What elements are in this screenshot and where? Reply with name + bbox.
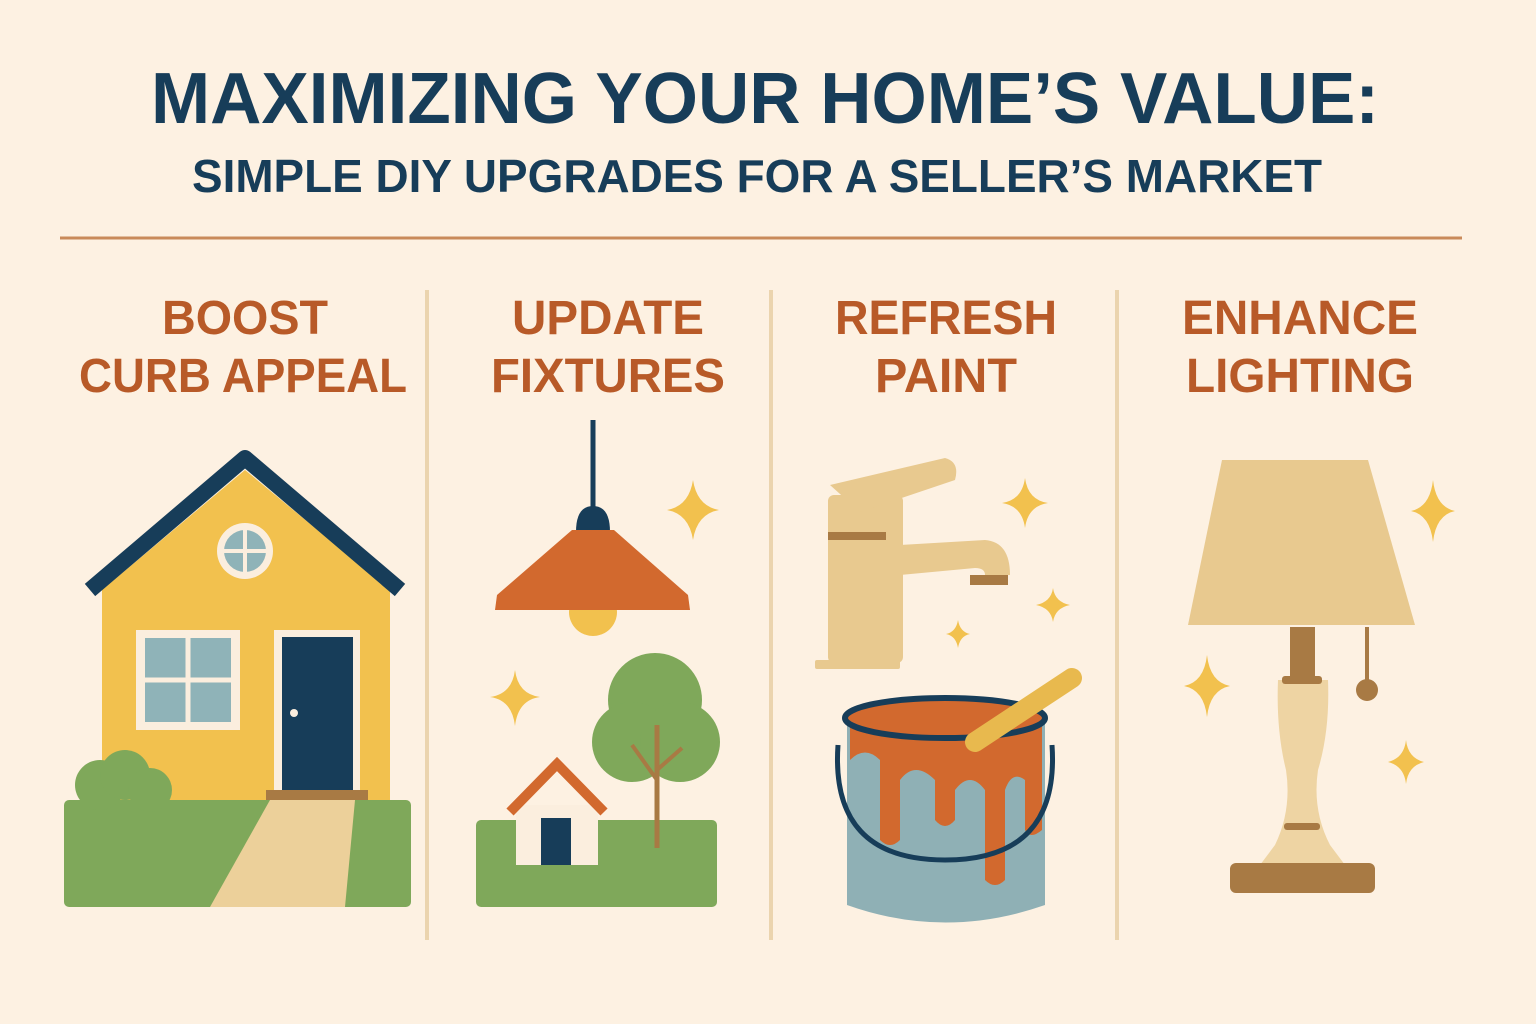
heading: enhance lighting: LIGHTING xyxy=(1186,350,1414,403)
icon: house xyxy=(64,458,411,907)
heading: refresh paint xyxy=(835,292,1057,403)
heading: update fixtures: FIXTURES xyxy=(491,350,725,403)
heading: enhance lighting xyxy=(1182,292,1418,403)
heading: update fixtures: UPDATE xyxy=(512,292,704,345)
icon: faucet and paint can xyxy=(815,458,1072,922)
icon: pendant lamp and small house xyxy=(476,420,720,907)
heading: boost curb appeal: BOOST xyxy=(162,292,328,345)
heading: boost curb appeal: CURB APPEAL xyxy=(79,350,407,403)
heading: enhance lighting: ENHANCE xyxy=(1182,292,1418,345)
heading: update fixtures xyxy=(491,292,725,403)
heading: boost curb appeal xyxy=(79,292,407,403)
heading: refresh paint: PAINT xyxy=(875,350,1017,403)
icon: table lamp xyxy=(1184,460,1455,893)
title: MAXIMIZING YOUR HOME’S VALUE: xyxy=(151,59,1379,139)
heading: refresh paint: REFRESH xyxy=(835,292,1057,345)
subtitle: SIMPLE DIY UPGRADES FOR A SELLER’S MARKET xyxy=(192,150,1322,202)
